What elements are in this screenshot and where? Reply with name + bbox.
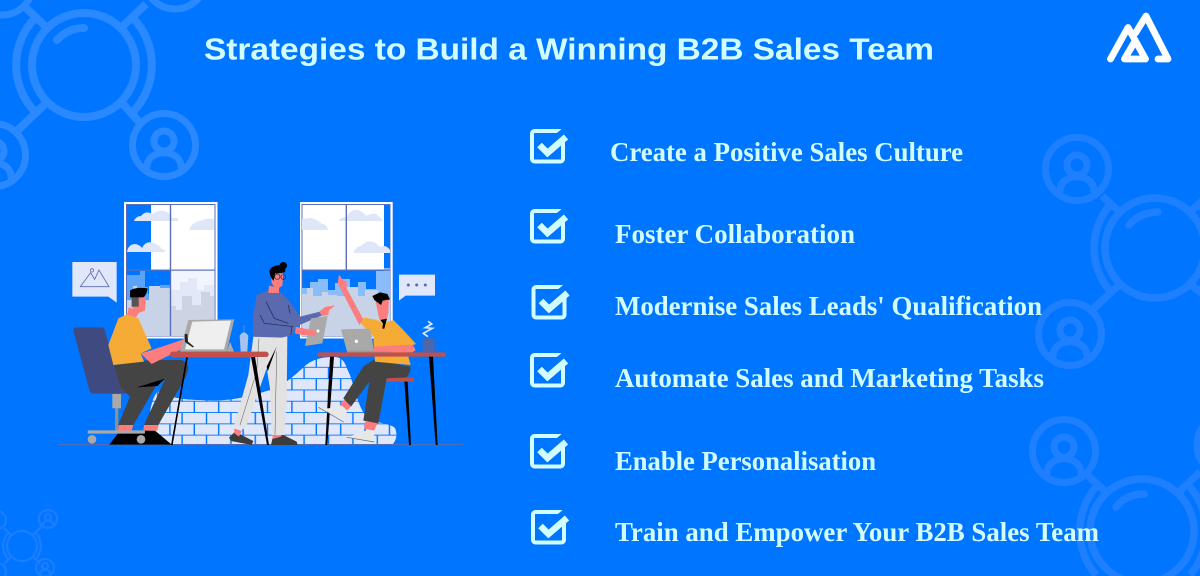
stylus xyxy=(185,334,194,347)
item 3 text: Modernise Sales Leads' Qualification xyxy=(615,291,1042,321)
illustration: office team xyxy=(58,202,463,445)
floor line xyxy=(58,444,463,445)
decorative network: right middle xyxy=(1038,138,1200,366)
arm xyxy=(141,337,192,364)
shoes xyxy=(229,432,298,445)
decorative network: top left xyxy=(0,0,206,186)
title: Strategies to Build a Winning B2B Sales Team xyxy=(204,32,934,66)
decorative network: bottom left small xyxy=(0,510,57,576)
raised arm xyxy=(338,274,363,325)
ankles xyxy=(340,399,378,431)
drink cup xyxy=(240,325,248,352)
chair base xyxy=(88,430,145,444)
stool xyxy=(385,378,414,445)
desk top xyxy=(317,352,446,357)
checkbox 2 xyxy=(532,211,566,242)
holding hand xyxy=(295,327,317,336)
neck and head xyxy=(127,288,148,317)
head xyxy=(268,262,287,293)
shoe soles xyxy=(318,407,374,442)
ankles xyxy=(234,428,282,439)
item 1 xyxy=(532,131,963,167)
trouser fold and desk leg xyxy=(251,347,277,445)
window right xyxy=(300,202,393,338)
item 6 text: Train and Empower Your B2B Sales Team xyxy=(615,517,1100,547)
brick wall xyxy=(148,357,396,445)
item 3 xyxy=(534,287,1042,321)
desk xyxy=(170,352,269,445)
checkbox 3 xyxy=(534,287,568,318)
laptop xyxy=(341,329,391,353)
checkbox 5 xyxy=(532,436,566,466)
item 6 xyxy=(533,512,1100,547)
item 2 xyxy=(532,211,855,249)
shoes xyxy=(319,405,375,442)
trouser shadow xyxy=(137,379,165,387)
trouser seams xyxy=(240,338,277,435)
item 5 xyxy=(532,436,876,476)
person seated right with desk xyxy=(317,274,446,445)
speech bubble: image xyxy=(72,262,117,303)
person standing centre xyxy=(222,262,335,445)
window left xyxy=(124,202,218,338)
item 1 text: Create a Positive Sales Culture xyxy=(610,137,963,167)
checkbox 1 xyxy=(532,131,566,162)
checkbox 4 xyxy=(532,355,566,386)
checkbox 6 xyxy=(533,512,567,542)
trousers xyxy=(234,336,287,435)
decorative network: bottom right xyxy=(1032,414,1200,576)
shirt xyxy=(359,318,416,365)
item 4 text: Automate Sales and Marketing Tasks xyxy=(615,363,1044,393)
desk end xyxy=(222,352,269,357)
pointing hand xyxy=(319,305,335,316)
checklist xyxy=(532,131,1100,547)
chair xyxy=(73,327,148,431)
head xyxy=(372,292,390,329)
forearm xyxy=(374,345,416,352)
trousers xyxy=(343,359,410,423)
tablet xyxy=(305,316,328,346)
item 5 text: Enable Personalisation xyxy=(615,446,876,476)
laptop xyxy=(180,319,234,352)
item 4 xyxy=(532,355,1044,393)
logo xyxy=(1110,16,1168,59)
coffee mug xyxy=(423,321,437,352)
shoes xyxy=(109,431,172,445)
sweater xyxy=(253,290,322,338)
person seated left with desk xyxy=(73,288,269,445)
sweater fold lines xyxy=(260,302,293,335)
ankles xyxy=(118,425,159,431)
shirt xyxy=(108,314,152,365)
speech bubble: dots xyxy=(399,275,435,301)
trousers xyxy=(114,360,188,425)
desk legs xyxy=(325,357,438,445)
item 2 text: Foster Collaboration xyxy=(615,219,855,249)
